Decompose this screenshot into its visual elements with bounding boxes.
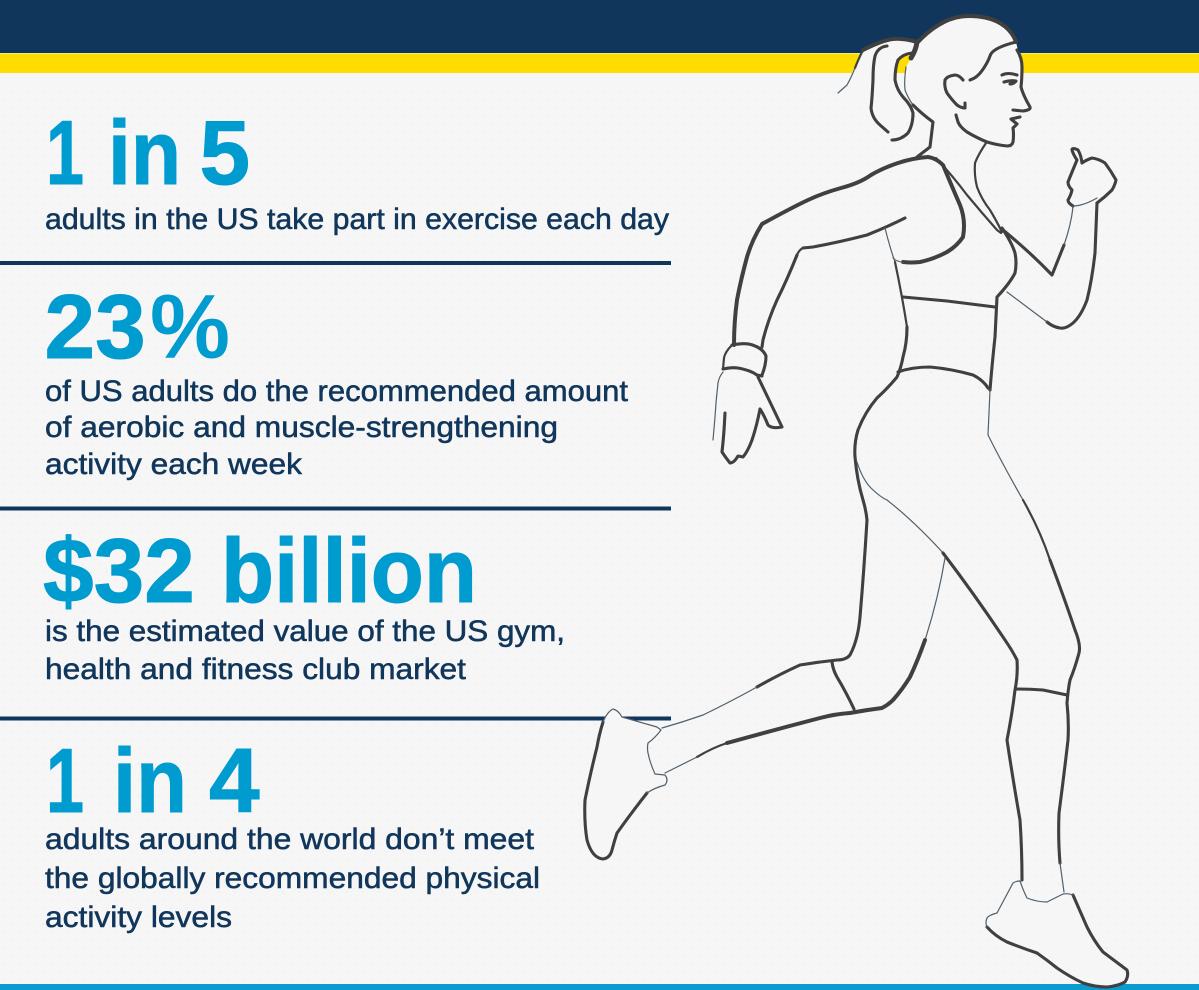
divider 3 — [0, 716, 671, 720]
yellow gap inside hair tie — [896, 55, 911, 73]
top navy band — [0, 0, 1199, 53]
stat number: $32 billion: billion — [221, 521, 477, 622]
stat description: global activity — [45, 823, 540, 934]
stat description: market value: is the estimated value of the US gym, — [45, 615, 565, 648]
stat block: $32 billion — [43, 521, 565, 686]
face — [945, 50, 1030, 146]
stat block: 1 in 4 — [45, 731, 540, 934]
stat description: recommended activity: activity each week — [45, 448, 302, 481]
stat description: recommended activity: of aerobic and muscle-strengthening — [45, 411, 558, 444]
front shoe — [986, 881, 1128, 987]
hair and head outline — [838, 16, 1016, 157]
stat number: 1 in 4: 1 — [46, 731, 84, 832]
legs — [662, 462, 1080, 892]
stat number: 23%: 23 — [44, 277, 146, 378]
rear shoe — [585, 709, 667, 859]
stat block: 1 in 5 — [45, 103, 669, 236]
stat description: market value: health and fitness club market — [45, 653, 466, 686]
front arm and fist — [1003, 148, 1116, 328]
divider 1 — [0, 261, 671, 265]
stat description: recommended activity: of US adults do the recommended amount — [45, 375, 628, 408]
stat description: global activity: activity levels — [45, 901, 232, 934]
illustration: running woman line drawing — [585, 16, 1128, 987]
bottom blue band — [0, 984, 1199, 990]
torso and rear arm — [734, 143, 1023, 520]
stat description: global activity: the globally recommended physical — [45, 862, 540, 895]
stat description: daily exercise: adults in the US take part in exercise each day — [45, 203, 669, 236]
head and ponytail fill — [838, 16, 1030, 142]
stat number: 1 in 5: 1 — [46, 103, 84, 204]
stat description: market value — [45, 615, 565, 686]
yellow band — [0, 54, 1199, 73]
divider 2 — [0, 506, 671, 510]
stat number: 1 in 4: in — [113, 731, 187, 832]
stat block: 23% — [44, 277, 628, 481]
stat number: 1 in 5: 5 — [200, 103, 250, 204]
stat number: 23%: % — [150, 277, 230, 378]
stat description: recommended activity — [45, 375, 628, 481]
stat number: 1 in 5: in — [108, 103, 181, 204]
stat number: $32 billion: $32 — [43, 521, 195, 622]
stat description: global activity: adults around the world don’t meet — [45, 823, 534, 856]
wristband and rear hand — [713, 344, 782, 463]
stat number: 1 in 4: 4 — [209, 731, 260, 832]
